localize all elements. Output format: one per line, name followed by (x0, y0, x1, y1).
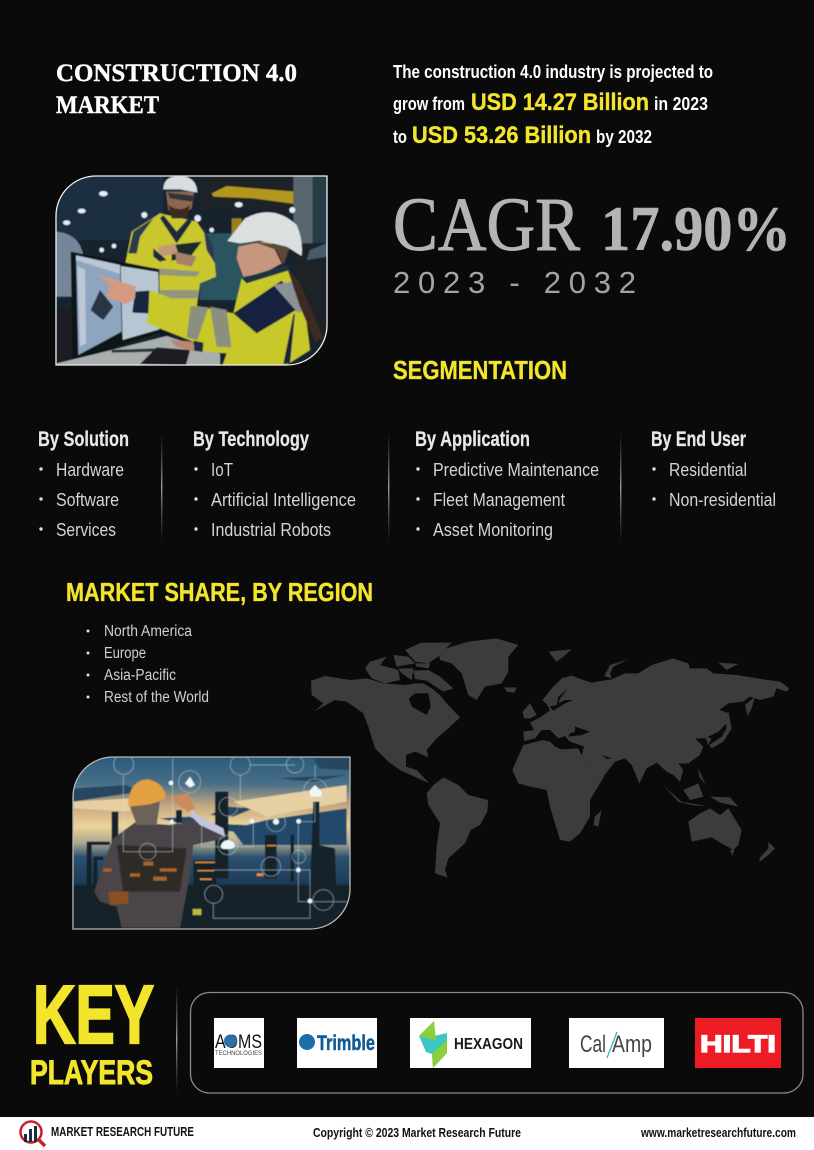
segment: by solution: Software (56, 490, 119, 510)
segment: by technology (193, 428, 356, 540)
Iceland (504, 687, 517, 693)
IoT icons (114, 754, 347, 918)
segment: by application: Predictive Maintenance (433, 460, 599, 480)
logo: Hilti: HILTI (700, 1031, 776, 1058)
Svalbard, Novaya Zemlya, Severnaya Zemlya (548, 649, 738, 678)
market share heading: MARKET SHARE, BY REGION (66, 577, 373, 607)
region list: Europe (104, 645, 146, 662)
segment: by end user: Residential (669, 460, 747, 480)
logo: Trimble: Trimble (317, 1032, 375, 1055)
region list: Rest of the World (104, 689, 209, 706)
footer: Copyright © 2023 Market Research Future (313, 1126, 521, 1140)
refinery lights (195, 845, 276, 880)
Hudson Bay (409, 693, 431, 715)
logo: Trimble (297, 1018, 377, 1068)
woman (147, 268, 310, 365)
title (56, 60, 297, 119)
market projection text: in 2023 (654, 94, 708, 114)
CAGR figure (393, 183, 791, 300)
Arctic islands (365, 643, 453, 692)
key players heading: KEY (33, 968, 154, 1061)
UK and Ireland (523, 703, 537, 718)
world map (311, 638, 789, 878)
Greenland (438, 638, 518, 700)
man (94, 819, 226, 928)
market projection text: USD 53.26 Billion (412, 122, 591, 149)
title: CONSTRUCTION 4.0 (56, 60, 297, 87)
market projection text: by 2032 (596, 127, 652, 147)
market projection text: grow from (393, 94, 465, 114)
logo: CalAmp: Cal (580, 1031, 606, 1058)
key players heading: PLAYERS (30, 1054, 153, 1092)
Sakhalin (745, 697, 755, 716)
Black Sea (568, 727, 590, 737)
Eurasia (523, 658, 789, 783)
logo: AOMS (214, 1018, 264, 1068)
Japan and Korea (705, 712, 732, 748)
CAGR figure: 17.90% (601, 194, 791, 264)
segment: by application: By Application (415, 428, 530, 451)
key players heading (30, 968, 154, 1092)
segmentation heading: SEGMENTATION (393, 355, 567, 385)
Persian Gulf (602, 755, 612, 759)
Southeast Asia islands (663, 768, 738, 807)
title: MARKET (56, 92, 159, 119)
CAGR figure: 2023 - 2032 (393, 265, 636, 300)
footer (0, 1117, 814, 1150)
Baltic Sea (549, 688, 573, 711)
logo: Hilti (695, 1018, 781, 1068)
North America (311, 676, 460, 783)
segment: by technology: IoT (211, 460, 233, 480)
region list: North America (104, 623, 192, 640)
segment: by application: Asset Monitoring (433, 520, 553, 540)
market projection text: USD 14.27 Billion (471, 89, 649, 116)
segment: by solution: Hardware (56, 460, 124, 480)
Tasmania (730, 850, 734, 856)
segment: by technology: Artificial Intelligence (211, 490, 356, 510)
footer: MARKET RESEARCH FUTURE (51, 1125, 194, 1139)
footer logo icon (20, 1122, 45, 1146)
CAGR figure: CAGR (393, 183, 580, 267)
logo: CalAmp: Amp (612, 1031, 652, 1058)
logo: AOMS: TECHNOLOGIES (215, 1051, 262, 1057)
logo: CalAmp (569, 1018, 664, 1068)
Australia (688, 808, 742, 850)
Madagascar (593, 810, 602, 827)
segment: by end user: Non-residential (669, 490, 776, 510)
Africa (512, 740, 604, 842)
segment: by application (415, 428, 599, 540)
segment: by solution: By Solution (38, 428, 129, 451)
region list (86, 623, 209, 706)
region list: Asia-Pacific (104, 667, 176, 684)
segment: by solution: Services (56, 520, 116, 540)
market projection text (393, 62, 713, 149)
segment: by end user: By End User (651, 428, 746, 451)
ceiling lights (63, 191, 295, 252)
segment: by end user (651, 428, 776, 510)
segment: by application: Fleet Management (433, 490, 565, 510)
market projection text: The construction 4.0 industry is projected to (393, 62, 713, 82)
logo: Hexagon (410, 1018, 531, 1068)
refinery towers (72, 792, 352, 930)
segment: by solution (38, 428, 129, 540)
key players panel (190, 992, 803, 1093)
market projection text: to (393, 127, 407, 147)
logo: Hexagon: HEXAGON (454, 1036, 523, 1053)
photo: engineer at refinery (72, 754, 352, 930)
segment: by technology: By Technology (193, 428, 309, 451)
New Zealand (759, 842, 775, 862)
segment: by technology: Industrial Robots (211, 520, 331, 540)
photo: engineers at monitor (53, 173, 328, 367)
South America (427, 777, 488, 878)
logo: AOMS: AOMS (215, 1032, 262, 1053)
